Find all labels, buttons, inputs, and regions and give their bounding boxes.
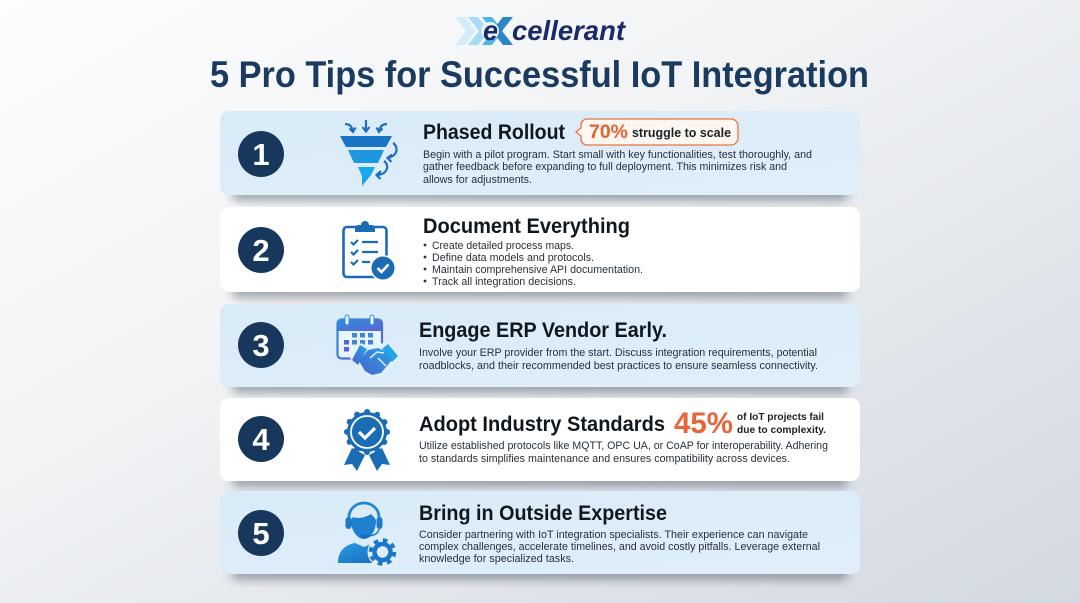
logo: excellerant: e [483, 15, 498, 46]
bullet list: Define data models and protocols. [432, 252, 594, 264]
number 2 [238, 227, 284, 273]
panel: tip 1 phased rollout [220, 111, 860, 201]
body text: Consider partnering with IoT integration specialists. Their experience can navigate [419, 529, 808, 541]
logo: excellerant [455, 15, 627, 46]
icon: support person with gear [338, 503, 398, 567]
body text: roadblocks, and their recommended best practices to ensure seamless connectivity. [419, 360, 818, 372]
callout: 70% struggle to scale: 70% [589, 122, 628, 143]
panel: tip 5 outside expertise [220, 491, 860, 580]
body text: complex challenges, accelerate timelines, and avoid costly pitfalls. Leverage external [419, 541, 820, 553]
bullet list [424, 240, 643, 288]
icon: award rosette [344, 412, 390, 471]
body text: Involve your ERP provider from the start. Discuss integration requirements, potential [419, 347, 817, 359]
panel: tip 4 adopt industry standards [220, 398, 860, 487]
icon: funnel [340, 120, 397, 186]
number 1: 1 [252, 137, 270, 172]
icon: clipboard with check [344, 221, 396, 281]
heading: Phased Rollout [423, 121, 565, 144]
number 1 [238, 131, 284, 177]
body text [423, 149, 812, 186]
number 5 [238, 510, 284, 556]
body text: Utilize established protocols like MQTT, OPC UA, or CoAP for interoperability. Adhering [419, 440, 828, 452]
body text: allows for adjustments. [423, 174, 532, 186]
heading: Adopt Industry Standards [419, 413, 665, 436]
callout: 45% of IoT projects fail [674, 407, 826, 440]
number 4: 4 [252, 422, 270, 457]
title: 5 Pro Tips for Successful IoT Integration [210, 54, 869, 95]
body text [419, 347, 818, 372]
icon: calendar and handshake [337, 315, 400, 376]
bullet list: Create detailed process maps. [432, 240, 574, 252]
number 4 [238, 416, 284, 462]
body text: gather feedback before expanding to full deployment. This minimizes risk and [423, 161, 787, 173]
body text: to standards simplifies maintenance and ensures compatibility across devices. [419, 453, 790, 465]
callout: 45% of IoT projects fail: of IoT projects fail [737, 411, 824, 423]
callout: 70% struggle to scale: struggle to scale [632, 126, 731, 140]
body text: knowledge for specialized tasks. [419, 553, 574, 565]
number 2: 2 [252, 233, 270, 268]
bullet list: Maintain comprehensive API documentation. [432, 264, 643, 276]
body text: Begin with a pilot program. Start small with key functionalities, test thoroughly, and [423, 149, 812, 161]
number 3 [238, 322, 284, 368]
callout: 45% of IoT projects fail: due to complexity. [737, 424, 826, 436]
panel: tip 2 document everything [220, 207, 860, 298]
callout: 70% struggle to scale [576, 119, 738, 145]
heading: Document Everything [423, 215, 630, 238]
body text [419, 440, 828, 465]
callout: 45% of IoT projects fail: 45% [674, 407, 733, 440]
panel: tip 3 engage erp vendor [220, 304, 860, 393]
heading: Bring in Outside Expertise [419, 502, 667, 525]
number 3: 3 [252, 328, 270, 363]
number 5: 5 [252, 516, 270, 551]
logo: excellerant: cellerant [512, 15, 627, 46]
bullet list: Track all integration decisions. [432, 276, 576, 288]
body text [419, 529, 820, 565]
heading: Engage ERP Vendor Early. [419, 319, 667, 342]
